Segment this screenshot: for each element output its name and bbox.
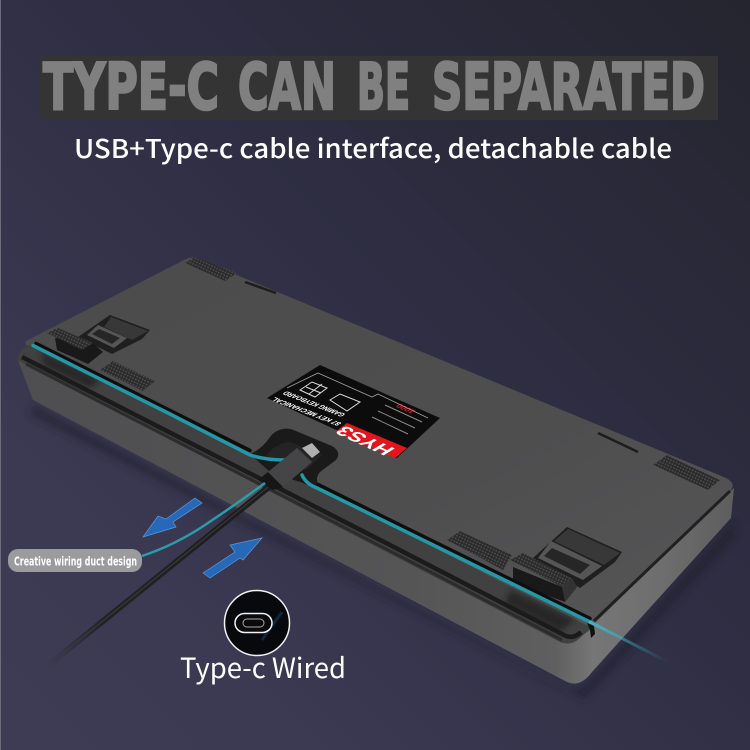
keyboard side wall [18, 345, 734, 684]
label sticker [267, 365, 440, 458]
product name: 87 KEY MECHANICAL [269, 396, 344, 427]
keyboard top face [25, 258, 733, 628]
keyboard shadow [30, 404, 736, 700]
subtitle: USB+Type-c cable interface, detachable cable [74, 129, 672, 166]
slot: top left [245, 282, 276, 293]
label: type-c wired: Type-c Wired [180, 647, 346, 687]
sticker icons [300, 382, 360, 411]
label sticker: GAMING KEYBOARD [280, 390, 348, 418]
rubber pad: back left [185, 257, 237, 281]
foot: right [510, 553, 577, 602]
cable notch [250, 429, 338, 490]
spec lines [372, 405, 422, 434]
title banner: TYPE-C [43, 51, 219, 125]
front lip [18, 344, 592, 644]
red logo block [335, 423, 407, 458]
foot: left [47, 328, 103, 364]
red model number: 1000 [393, 402, 418, 415]
title banner [39, 51, 718, 125]
lip groove [22, 357, 581, 637]
wire to label [142, 483, 265, 556]
rubber pad: front right [447, 531, 512, 570]
rubber pad: back right [653, 455, 720, 490]
logo: HYS3 [331, 423, 400, 457]
title banner: CAN [238, 51, 336, 125]
foot recess: right [533, 527, 622, 588]
callout: wiring duct: Creative wiring duct design [14, 554, 137, 568]
keyboard [18, 257, 736, 700]
foot recess: left [78, 315, 150, 354]
icon: type-c port [224, 590, 290, 656]
USB-C connector and cable [45, 443, 320, 668]
arrow: out [143, 498, 202, 537]
right edge groove [594, 491, 730, 621]
title banner: BE [357, 51, 410, 125]
foot shadows on lip [40, 352, 575, 632]
rubber pad: front left [100, 361, 155, 391]
arrow: in [203, 538, 262, 578]
slot: top right [598, 433, 638, 452]
teal wiring duct line [33, 344, 668, 662]
callout: wiring duct [8, 549, 142, 572]
